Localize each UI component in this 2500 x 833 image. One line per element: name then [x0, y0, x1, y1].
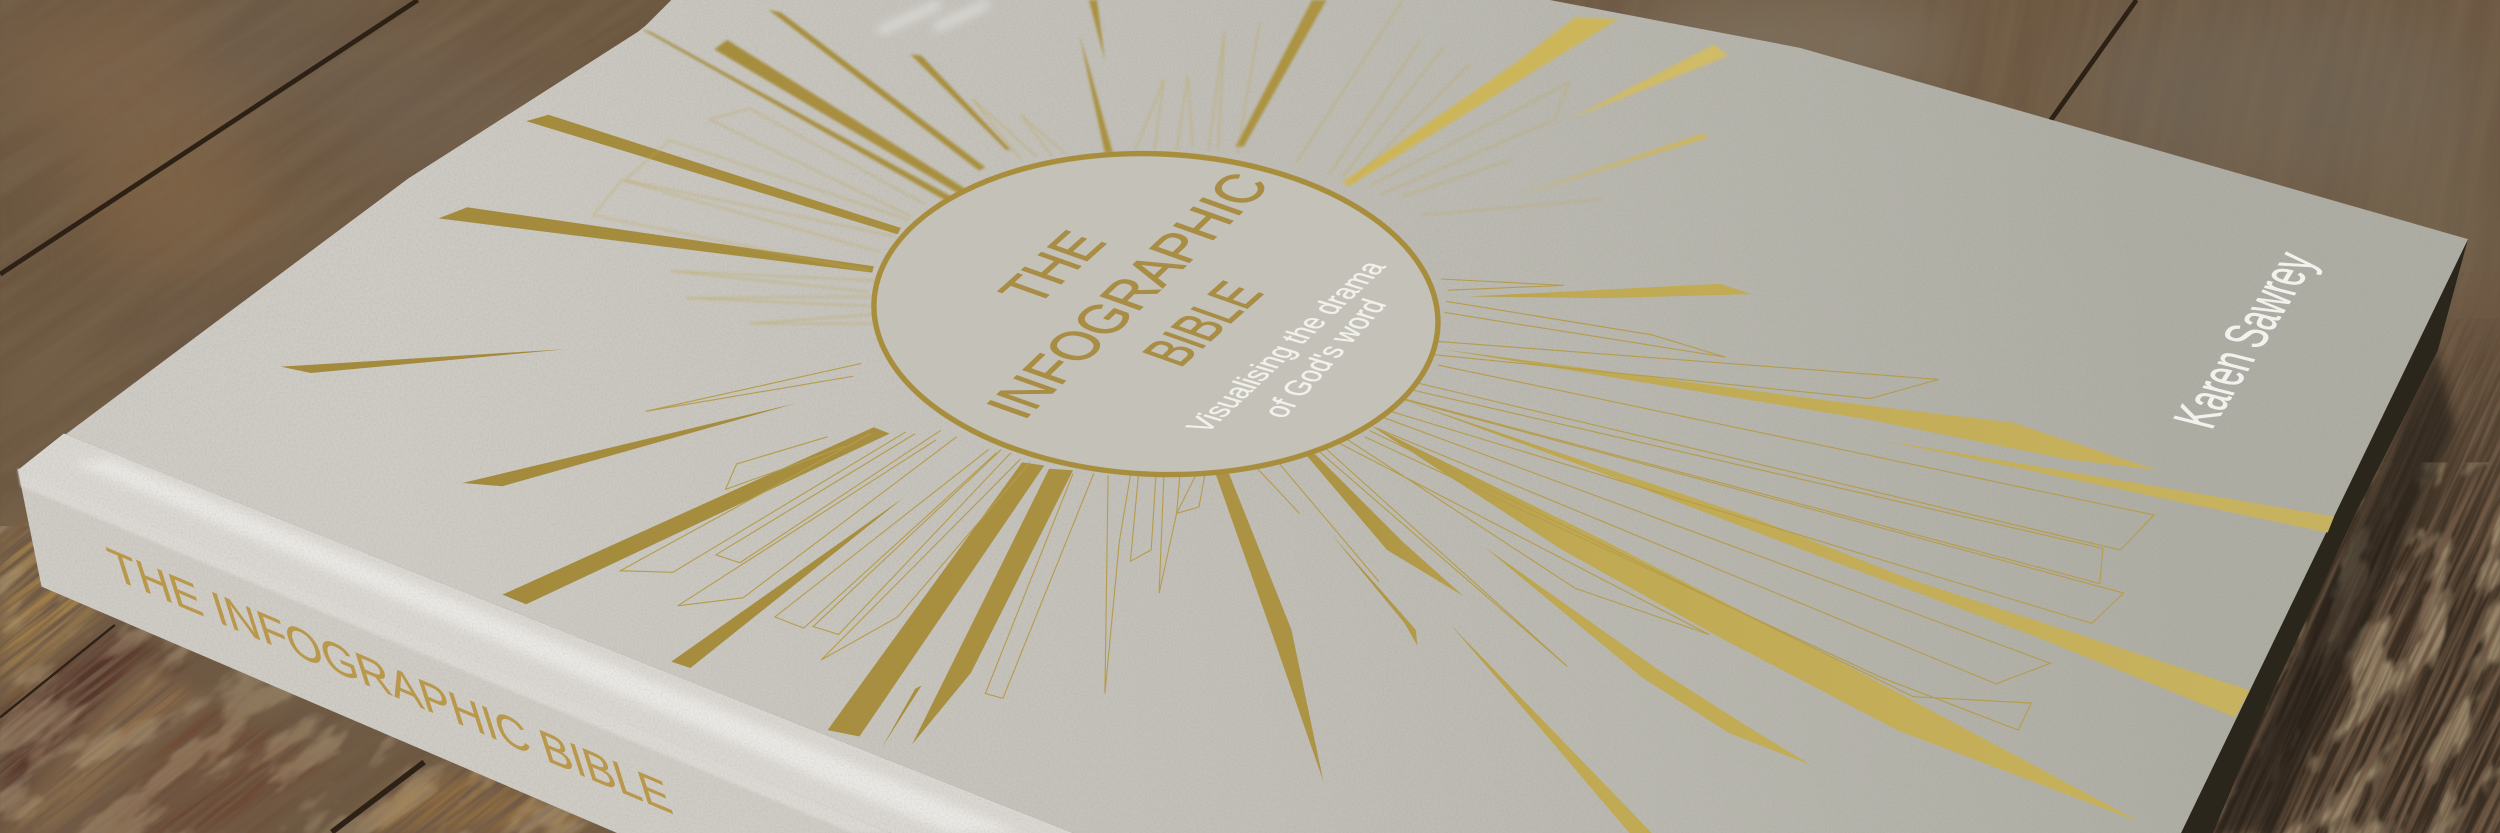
left rays [526, 115, 901, 234]
central gold ring [867, 142, 1445, 486]
subtitle: of God's word [1255, 295, 1395, 422]
subtitle: Visualising the drama [1179, 258, 1394, 436]
shadow beside back cover [2213, 351, 2455, 833]
title: The Infographic Bible: INFOGRAPHIC [972, 166, 1284, 425]
spine face [18, 469, 891, 833]
back cover dark edge [2165, 239, 2468, 833]
spine title: THE INFOGRAPHIC BIBLE [102, 538, 678, 825]
title: The Infographic Bible: THE [984, 224, 1120, 311]
pale upper sunburst lines [593, 0, 1602, 324]
title: The Infographic Bible: BIBLE [1128, 274, 1277, 373]
right rays [1468, 284, 1752, 298]
cloth texture [20, 0, 1216, 833]
sunburst outline rays [620, 279, 2154, 730]
out-of-focus top rays [641, 0, 1728, 204]
blurred foreword marks at top edge [882, 5, 985, 30]
author name: Karen Sawrey [2161, 246, 2330, 434]
hinge band [18, 434, 1073, 833]
